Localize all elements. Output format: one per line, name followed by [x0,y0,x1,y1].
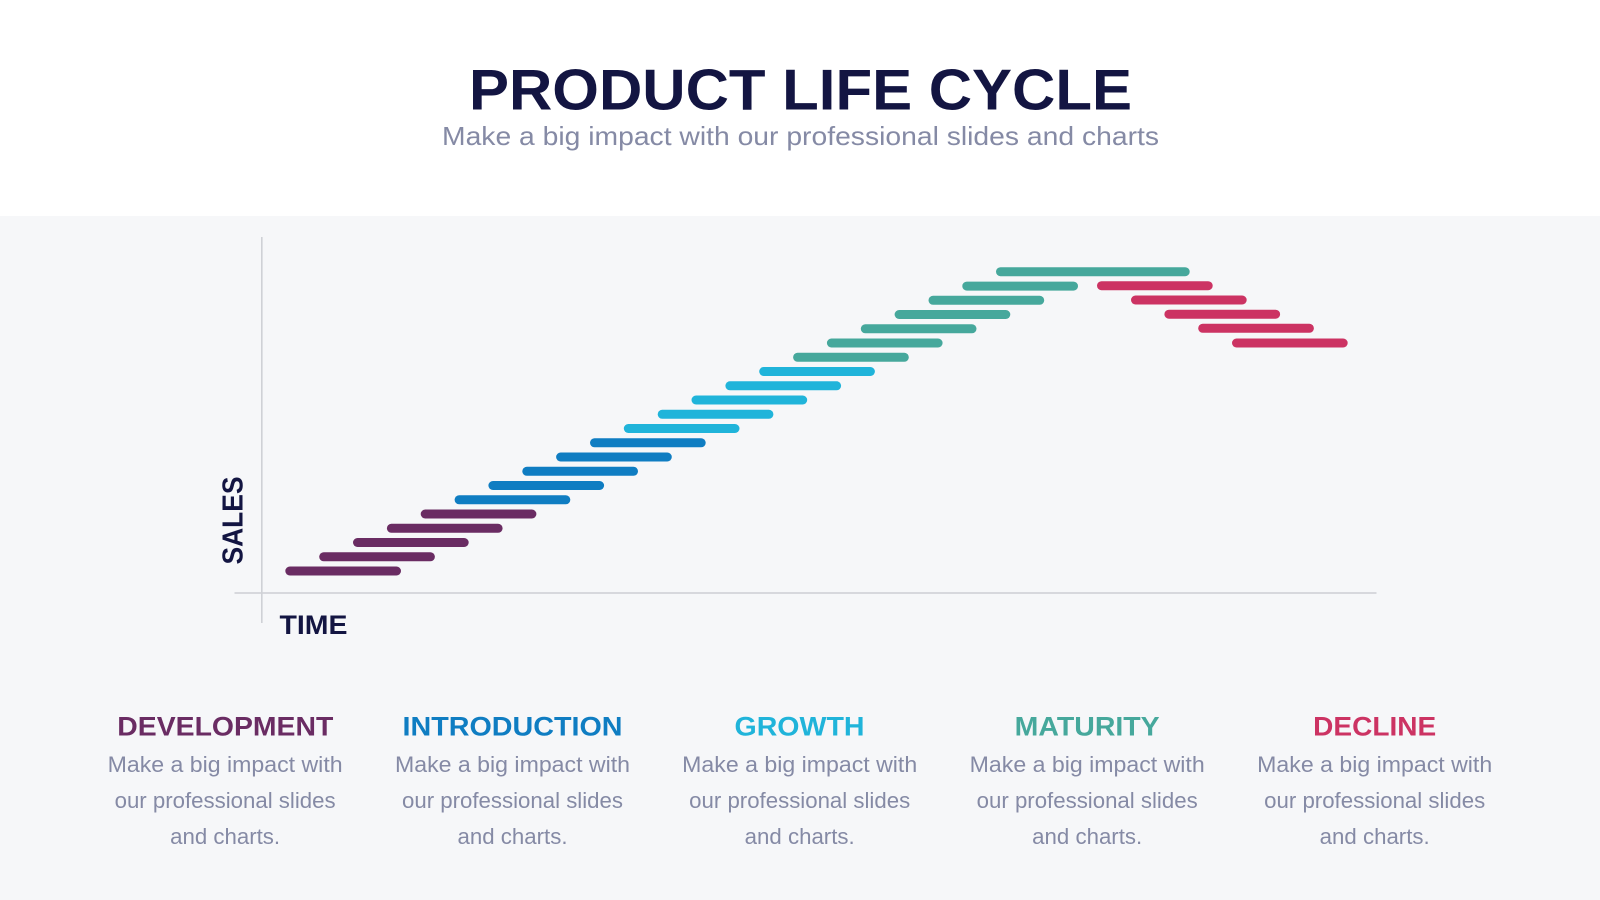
heading: development: DEVELOPMENT [117,712,334,742]
panel: development [108,712,343,849]
text: development description: Make a big impact with [108,752,343,777]
axis: sales vertical line [261,237,263,623]
text: decline description: our professional slides [1264,788,1485,813]
axis: time horizontal line [234,592,1376,594]
text: development description: and charts. [170,824,280,849]
panel: decline [1257,712,1492,849]
text: development description: our professional slides [115,788,336,813]
heading: maturity: MATURITY [1015,712,1160,742]
text: maturity description: Make a big impact with [970,752,1205,777]
bars: growth stage [624,367,875,433]
heading: growth: GROWTH [734,712,864,742]
chart: product life cycle sales over time [217,237,1376,640]
text: growth description: Make a big impact with [682,752,917,777]
text: maturity description: and charts. [1032,824,1142,849]
text: introduction description: and charts. [458,824,568,849]
axis label: sales: SALES [217,476,249,564]
panel: introduction [395,712,630,849]
title: PRODUCT LIFE CYCLE [469,58,1132,122]
text: maturity description: our professional slides [977,788,1198,813]
heading: decline: DECLINE [1313,712,1436,742]
bars: maturity stage [793,267,1190,362]
axis label: time: TIME [280,610,348,640]
text: growth description [682,752,917,849]
bars: decline stage [1097,281,1348,348]
text: maturity description [970,752,1205,849]
text: decline description: and charts. [1320,824,1430,849]
heading: introduction: INTRODUCTION [402,712,622,742]
panel: growth [682,712,917,849]
text: introduction description [395,752,630,849]
panel: grey content background [0,216,1600,900]
panel: maturity [970,712,1205,849]
subtitle: Make a big impact with our professional slides and charts [442,121,1159,151]
text: growth description: and charts. [745,824,855,849]
text: development description [108,752,343,849]
text: introduction description: our professional slides [402,788,623,813]
text: decline description [1257,752,1492,849]
bars: development stage [285,510,536,576]
text: growth description: our professional slides [689,788,910,813]
text: introduction description: Make a big impact with [395,752,630,777]
bars: introduction stage [455,438,706,504]
text: decline description: Make a big impact with [1257,752,1492,777]
